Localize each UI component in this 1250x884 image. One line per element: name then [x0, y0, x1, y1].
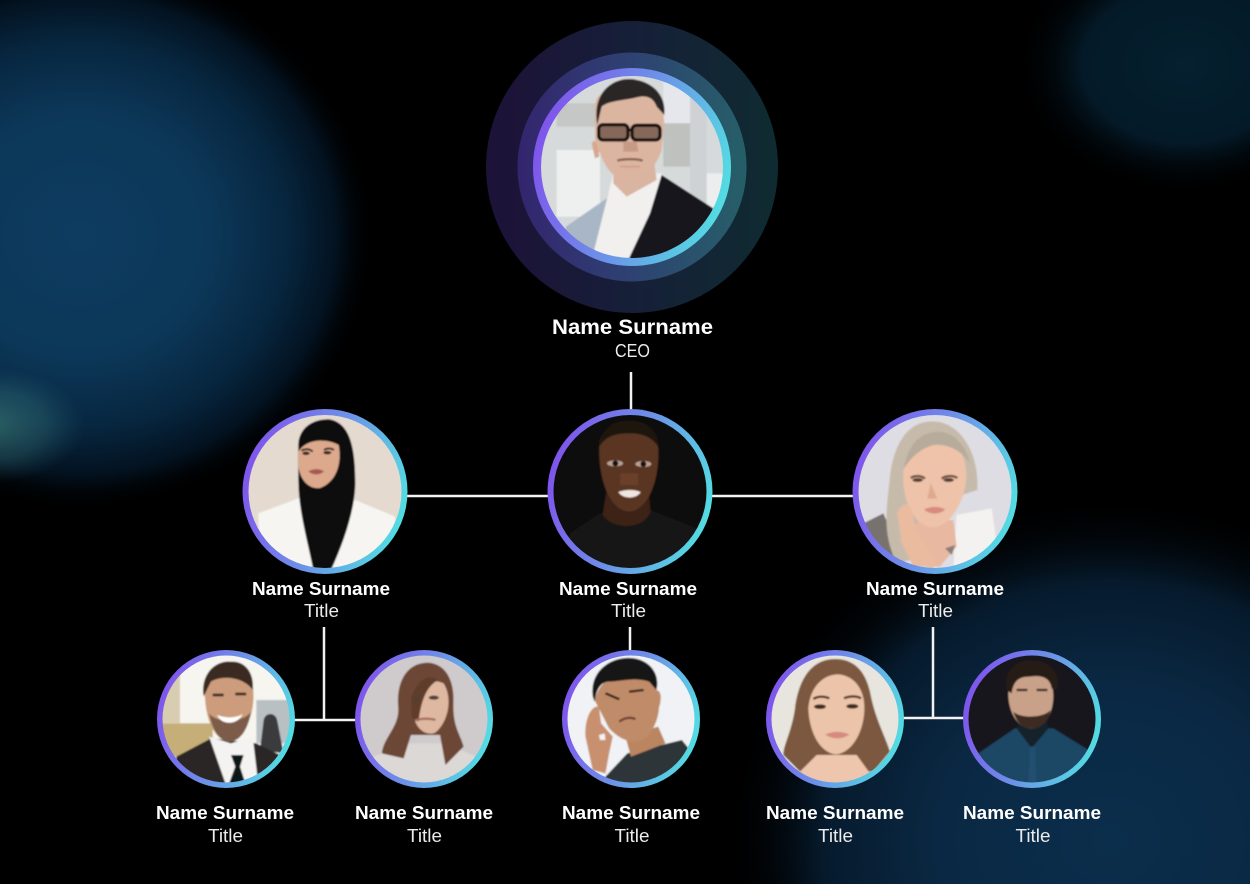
title: Title — [407, 826, 442, 846]
name: Name Surname — [963, 803, 1101, 823]
portrait: man with hand on temple — [568, 656, 694, 782]
title: Title — [611, 601, 646, 621]
name: Name Surname — [552, 316, 713, 339]
title: Title — [614, 826, 650, 846]
gradient ring — [766, 650, 904, 788]
name: Name Surname — [866, 579, 1004, 599]
node: team member 5 — [963, 650, 1103, 846]
title: Title — [1016, 826, 1050, 846]
title: Title — [918, 601, 953, 621]
gradient ring — [157, 650, 295, 788]
gradient ring — [242, 409, 408, 574]
portrait: CEO — [541, 76, 723, 258]
gradient ring — [355, 650, 493, 788]
node: team member 3 — [562, 650, 702, 846]
portrait: woman with brown hair — [360, 656, 488, 782]
gradient ring — [963, 650, 1101, 788]
title: Title — [304, 601, 339, 621]
gradient ring — [562, 650, 700, 788]
portrait: blonde woman — [858, 415, 1012, 568]
portrait: man in black shirt — [554, 415, 706, 568]
gradient ring — [548, 409, 712, 574]
title: Title — [208, 826, 243, 846]
node: team member 4 — [766, 650, 907, 846]
connector lines — [294, 372, 964, 720]
gradient ring — [852, 409, 1018, 574]
node: team member 1 — [155, 650, 300, 846]
portrait: woman in hijab — [248, 415, 402, 568]
name: Name Surname — [559, 579, 697, 599]
node: CEO — [486, 21, 778, 361]
node: manager left — [242, 409, 408, 621]
portrait: woman with long hair — [772, 656, 898, 782]
name: Name Surname — [252, 579, 390, 599]
title: Title — [818, 826, 853, 846]
name: Name Surname — [156, 803, 294, 823]
name: Name Surname — [766, 803, 904, 823]
portrait: smiling man in suit — [162, 656, 290, 782]
name: Name Surname — [562, 803, 700, 823]
node: manager right — [850, 409, 1020, 621]
node: manager centre — [547, 409, 713, 621]
role: CEO — [615, 341, 650, 361]
name: Name Surname — [355, 803, 493, 823]
portrait: bearded man in denim shirt — [968, 656, 1096, 782]
node: team member 2 — [355, 650, 493, 846]
outer halo rings — [486, 21, 778, 313]
